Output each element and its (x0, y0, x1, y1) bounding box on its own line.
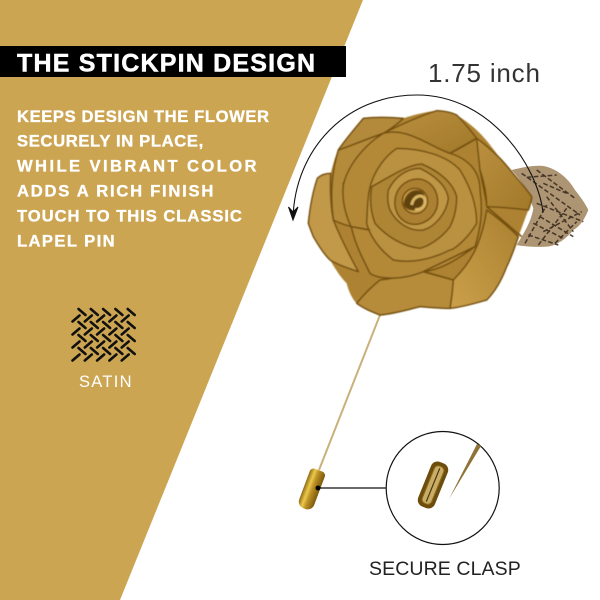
body text: ADDS A RICH FINISH (17, 182, 215, 200)
petal: bottom (357, 272, 453, 315)
callout circle (386, 432, 499, 544)
body text: KEEPS DESIGN THE FLOWER (17, 107, 270, 126)
ring one (343, 132, 481, 278)
clasp closeup (416, 459, 450, 511)
clasp cap (297, 467, 326, 511)
body text: TOUCH TO THIS CLASSIC (17, 206, 243, 226)
ring six (402, 188, 428, 214)
petal: left sash (308, 173, 358, 272)
clasp label: SECURE CLASP (369, 558, 521, 580)
rose centre (404, 191, 424, 210)
arrow: width arc (288, 95, 543, 220)
body text (17, 107, 270, 250)
body text: LAPEL PIN (17, 232, 116, 250)
body text: WHILE VIBRANT COLOR (17, 156, 259, 176)
icon: satin weave (72, 309, 135, 360)
gold background panel (0, 0, 363, 600)
callout line (316, 486, 386, 490)
pin shaft (319, 315, 380, 470)
needle closeup (449, 444, 481, 499)
petal: lower right (450, 210, 518, 308)
ring three (371, 164, 457, 248)
petal: top (383, 111, 477, 153)
heading: THE STICKPIN DESIGN (17, 49, 316, 77)
rose flower (308, 111, 532, 315)
width label: 1.75 inch (428, 58, 541, 88)
petal: right (477, 138, 532, 210)
arrowhead (288, 207, 298, 220)
petal: left middle (332, 133, 383, 227)
rose silhouette (308, 111, 532, 315)
rose centre curl (412, 196, 425, 210)
satin label: SATIN (79, 373, 133, 391)
satin seams (352, 138, 522, 280)
body text: SECURELY IN PLACE, (17, 132, 204, 150)
ring two (367, 148, 477, 261)
ring five (395, 179, 438, 224)
heading bar (0, 46, 346, 77)
leaf (512, 166, 588, 247)
ring four (388, 168, 448, 230)
petal: top left (338, 117, 403, 150)
